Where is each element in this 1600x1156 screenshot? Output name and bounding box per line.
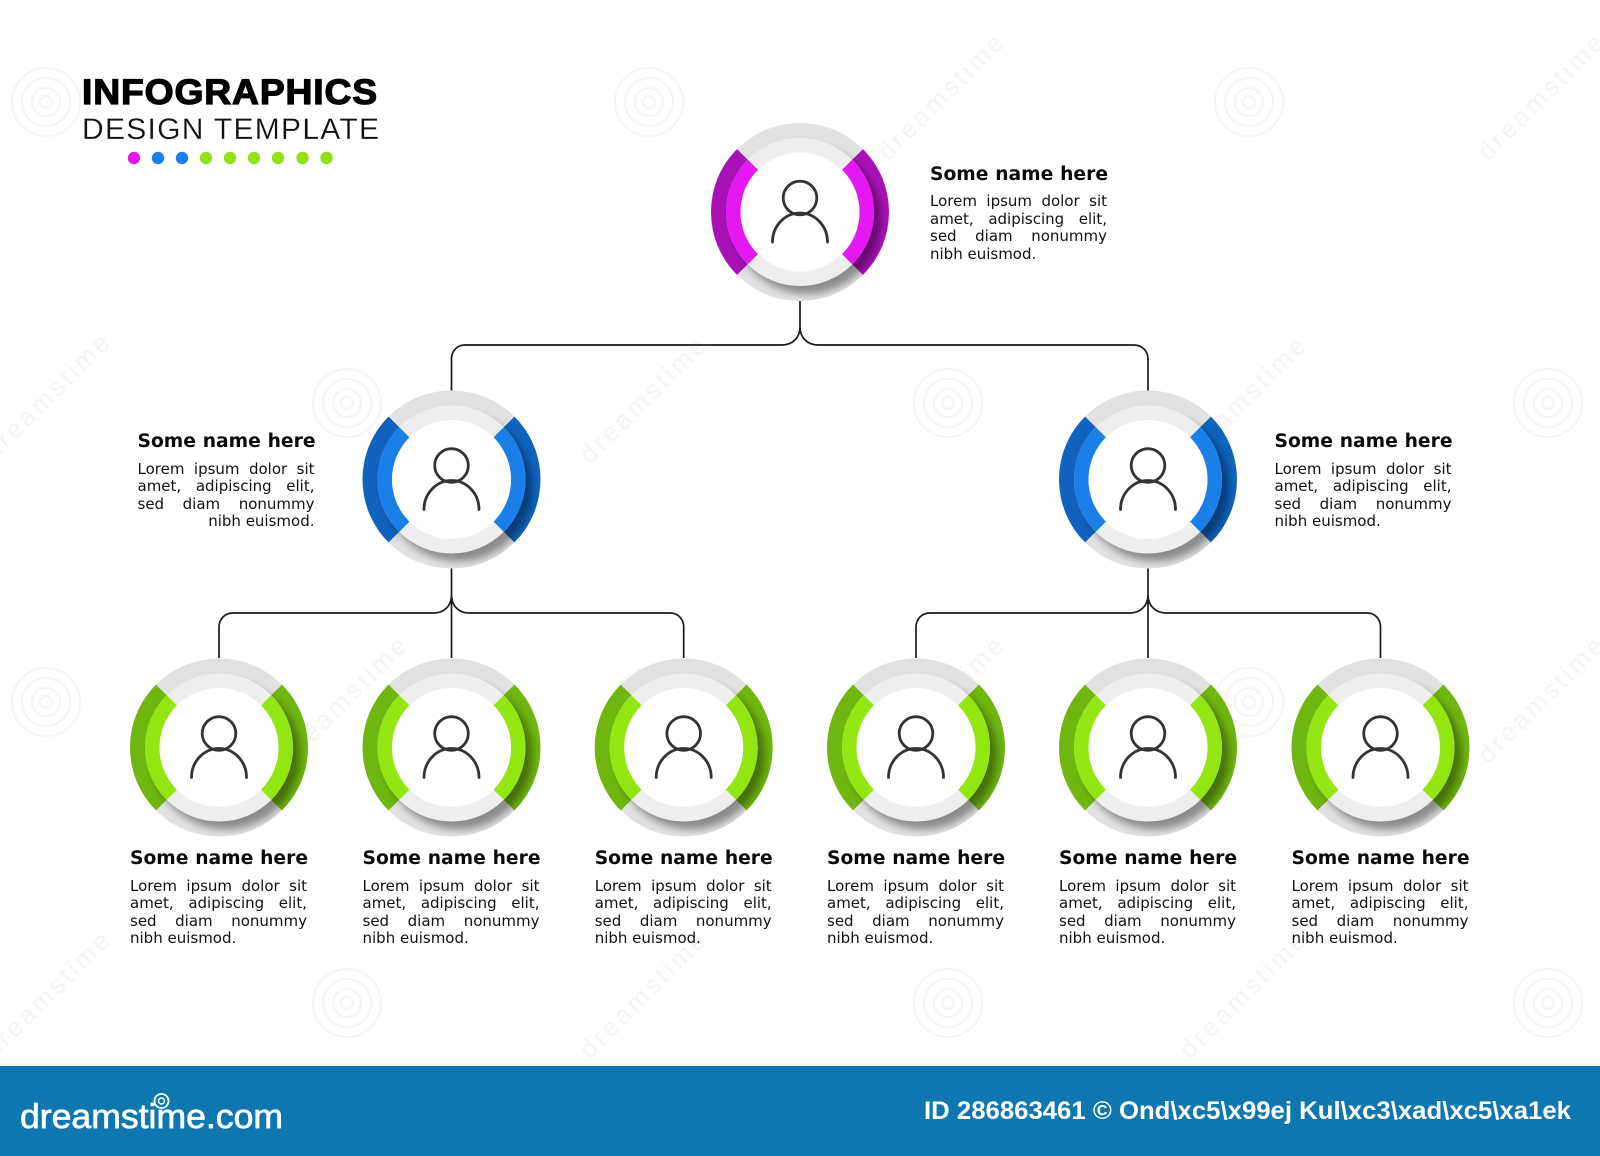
text: green node 6: Some name here (1292, 848, 1470, 869)
text: green node 3: amet, adipiscing elit, (595, 894, 772, 912)
text: green node 1: sed diam nonummy (130, 912, 307, 930)
text: green node 4: Some name here (827, 848, 1005, 869)
subtitle: design template: DESIGN TEMPLATE (82, 113, 379, 146)
text: green node 1: Lorem ipsum dolor sit (130, 877, 307, 895)
text: green node 1: amet, adipiscing elit, (130, 894, 307, 912)
text: left level two node: Some name here (138, 431, 316, 452)
watermark pattern: dreamstime (573, 926, 712, 1064)
node: top magenta (711, 123, 889, 301)
text: green node 5: amet, adipiscing elit, (1059, 894, 1236, 912)
text: green node 5: Some name here (1059, 848, 1237, 869)
text: left level two node: sed diam nonummy (138, 495, 314, 513)
text: green node 2: Some name here (362, 848, 540, 869)
text: green node 4: nibh euismod. (827, 929, 933, 947)
text: right level two node: Lorem ipsum dolor sit (1274, 460, 1452, 478)
text: green node 5 (1059, 848, 1237, 947)
text: green node 6: amet, adipiscing elit, (1292, 894, 1468, 912)
text: green node 1: Some name here (130, 848, 308, 869)
text: top node: amet, adipiscing elit, (930, 210, 1107, 228)
text: green node 6: Lorem ipsum dolor sit (1292, 877, 1468, 895)
node: green 4 (827, 658, 1005, 836)
watermark pattern: dreamstime (1173, 331, 1312, 469)
title: infographics: INFOGRAPHICS (82, 73, 378, 112)
watermark pattern: dreamstime (1173, 926, 1312, 1064)
footer band (0, 1066, 1600, 1156)
node: green 1 (130, 658, 308, 836)
text: green node 3: Lorem ipsum dolor sit (595, 877, 772, 895)
text: green node 4: sed diam nonummy (827, 912, 1004, 930)
watermark pattern: dreamstime (871, 631, 1010, 769)
text: green node 2: Lorem ipsum dolor sit (362, 877, 540, 895)
text: right level two node: Some name here (1274, 431, 1452, 452)
text: green node 5: sed diam nonummy (1059, 912, 1236, 930)
text: green node 5: nibh euismod. (1059, 929, 1165, 947)
text: top node (930, 164, 1108, 263)
text: green node 4: Lorem ipsum dolor sit (827, 877, 1004, 895)
text: left level two node: amet, adipiscing elit, (138, 477, 314, 495)
text: right level two node: amet, adipiscing elit, (1274, 477, 1452, 495)
text: top node: Some name here (930, 164, 1108, 184)
watermark pattern: dreamstime (274, 631, 413, 769)
text: green node 5: Lorem ipsum dolor sit (1059, 877, 1236, 895)
text: green node 1: nibh euismod. (130, 929, 236, 947)
node: green 2 (362, 658, 540, 836)
text: left level two node: nibh euismod. (208, 512, 314, 530)
connector: right branch (916, 568, 1380, 658)
text: green node 4: amet, adipiscing elit, (827, 894, 1004, 912)
text: left level two node: Lorem ipsum dolor sit (138, 460, 314, 478)
watermark pattern: dreamstime (573, 331, 712, 469)
text: top node: sed diam nonummy (930, 227, 1107, 245)
text: green node 4 (827, 848, 1005, 947)
node: green 6 (1292, 658, 1470, 836)
text: green node 2 (362, 848, 540, 947)
text: green node 1 (130, 848, 308, 947)
footer logo: dreamstime.com (20, 1098, 283, 1136)
node: left blue (362, 390, 540, 568)
text: green node 2: sed diam nonummy (362, 912, 540, 930)
node: green 5 (1059, 658, 1237, 836)
text: right level two node (1274, 431, 1452, 530)
text: green node 2: amet, adipiscing elit, (362, 894, 540, 912)
text: left level two node (138, 431, 316, 530)
footer credit: ID 286863461 © Ond\xc5\x99ej Kul\xc3\xad\xc5\xa1ek (924, 1097, 1571, 1125)
text: right level two node: nibh euismod. (1274, 512, 1381, 530)
text: green node 3: nibh euismod. (595, 929, 701, 947)
text: green node 3: Some name here (595, 848, 773, 869)
text: top node: nibh euismod. (930, 245, 1036, 263)
text: top node: Lorem ipsum dolor sit (930, 192, 1107, 210)
text: right level two node: sed diam nonummy (1274, 495, 1452, 513)
text: green node 6: sed diam nonummy (1292, 912, 1468, 930)
title colour dots (128, 152, 333, 164)
text: green node 6: nibh euismod. (1292, 929, 1398, 947)
text: green node 2: nibh euismod. (362, 929, 469, 947)
watermark pattern: dreamstime (871, 28, 1010, 166)
node: green 3 (595, 658, 773, 836)
text: green node 3 (595, 848, 773, 947)
node: right blue (1059, 390, 1237, 568)
connector: left branch (219, 568, 684, 658)
text: green node 3: sed diam nonummy (595, 912, 772, 930)
connector: top to level two (452, 301, 1148, 391)
text: green node 6 (1292, 848, 1470, 947)
